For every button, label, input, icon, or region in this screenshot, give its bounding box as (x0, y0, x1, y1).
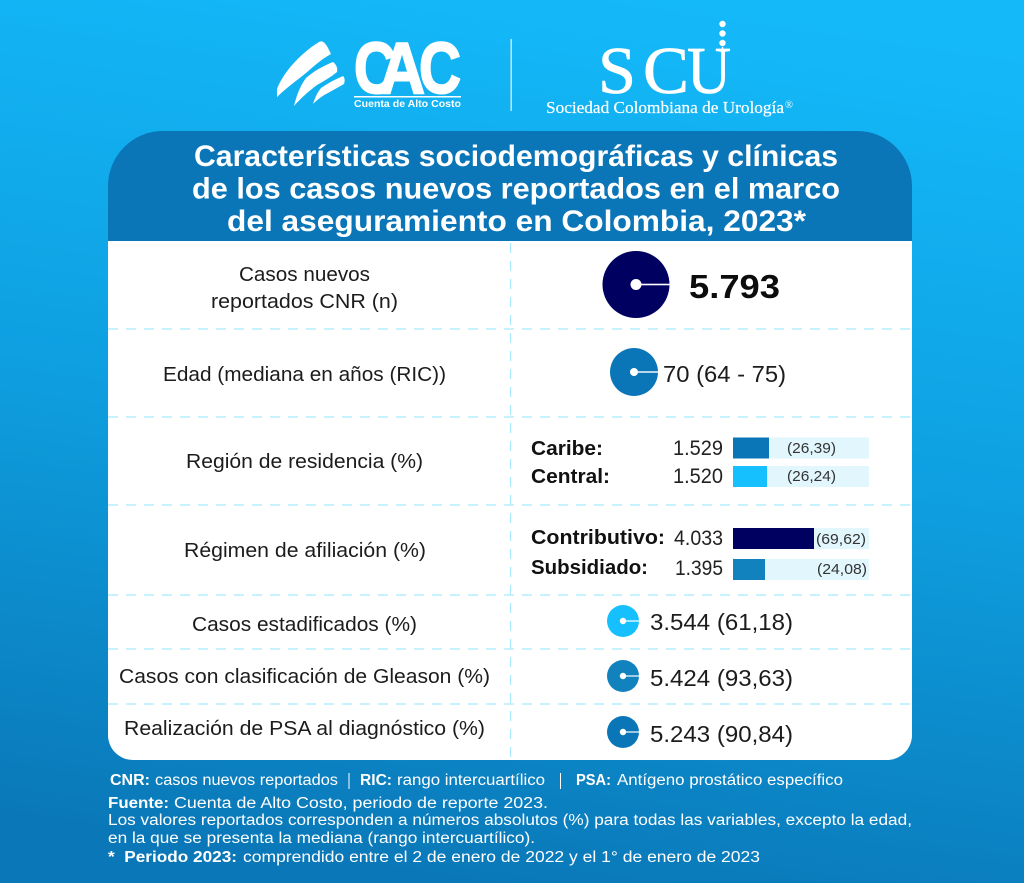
chart: region bars: (26,39) (787, 440, 836, 457)
footer: abbreviations (110, 772, 843, 789)
icon: circle PSA (607, 716, 640, 748)
row label: estadificados: Casos estadificados (%) (192, 614, 417, 636)
title: de los casos nuevos reportados en el marco (192, 172, 840, 206)
logo divider (510, 39, 512, 111)
value: casos nuevos: 5.793 (689, 268, 780, 305)
footer: source and notes: Los valores reportados corresponden a números absolutos (%) para todas las variables, excepto la edad, (108, 812, 912, 829)
icon: circle gleason (607, 660, 640, 692)
row label: region: Región de residencia (%) (186, 451, 423, 473)
value: edad: 70 (64 - 75) (663, 361, 786, 387)
chart: regimen bars: 4.033 (674, 527, 723, 550)
footer: abbreviations: casos nuevos reportados (155, 772, 338, 789)
footer: source and notes: en la que se presenta la mediana (rango intercuartílico). (108, 830, 535, 847)
chart: region bars: 1.529 (673, 437, 723, 460)
icon: circle casos nuevos (602, 251, 670, 318)
CAC wordmark (354, 29, 461, 109)
footer: abbreviations: Antígeno prostático específico (617, 772, 843, 789)
footer: abbreviations: PSA: (576, 772, 611, 789)
chart: regimen bars: 1.395 (675, 557, 723, 580)
row label: gleason: Casos con clasificación de Gleason (%) (119, 666, 490, 688)
footer: abbreviations: CNR: (110, 772, 150, 789)
SCU wordmark: C (643, 34, 689, 108)
CAC subtitle: Cuenta de Alto Costo (354, 98, 461, 110)
panel header (108, 131, 912, 241)
logo: SCU (546, 21, 793, 117)
title: Características sociodemográficas y clínicas (194, 140, 838, 173)
panel: main table (108, 131, 912, 760)
icon: CAC swooshes (277, 41, 345, 106)
row label: edad: Edad (mediana en años (RIC)) (163, 364, 446, 386)
row label: regimen: Régimen de afiliación (%) (184, 540, 426, 562)
row label: casos nuevos (211, 264, 398, 313)
panel body (108, 235, 912, 760)
icon: SCU dots (719, 21, 726, 53)
title: del aseguramiento en Colombia, 2023* (227, 205, 806, 238)
footer: source and notes: comprendido entre el 2 de enero de 2022 y el 1° de enero de 2023 (243, 849, 760, 866)
value: PSA: 5.243 (90,84) (650, 721, 793, 747)
SCU subtitle: Sociedad Colombiana de Urología (546, 98, 784, 117)
logo: CAC (277, 29, 461, 110)
row label: casos nuevos: reportados CNR (n) (211, 291, 398, 313)
icon: circle edad (610, 348, 658, 396)
chart: regimen bars: Contributivo: (531, 527, 665, 549)
value: gleason: 5.424 (93,63) (650, 665, 793, 691)
chart: region bars: Central: (531, 466, 610, 488)
chart: region bars: 1.520 (673, 465, 723, 488)
SCU wordmark: U (687, 34, 731, 108)
row label: PSA: Realización de PSA al diagnóstico (%) (124, 718, 485, 740)
chart: regimen bars (531, 527, 869, 580)
footer: abbreviations: rango intercuartílico (397, 772, 545, 789)
registered mark: ® (785, 100, 793, 111)
footer: source and notes: * Periodo 2023: (108, 849, 237, 866)
chart: region bars: (26,24) (787, 468, 836, 485)
footer: abbreviations: RIC: (360, 772, 392, 789)
chart: regimen bars: (24,08) (817, 561, 867, 578)
CAC wordmark: C (354, 29, 396, 109)
title (192, 140, 840, 238)
chart: regimen bars: Subsidiado: (531, 557, 648, 579)
footer: source and notes: Fuente: (108, 795, 169, 812)
footer: source and notes (108, 795, 912, 866)
icon: circle estadificados (607, 605, 640, 637)
chart: region bars: Caribe: (531, 438, 603, 460)
SCU wordmark: S (598, 34, 636, 108)
CAC wordmark: A (379, 29, 425, 109)
footer: source and notes: Cuenta de Alto Costo, periodo de reporte 2023. (174, 795, 548, 812)
SCU wordmark (598, 34, 731, 108)
value: estadificados: 3.544 (61,18) (650, 609, 793, 635)
CAC wordmark: C (419, 29, 461, 109)
row label: casos nuevos: Casos nuevos (239, 264, 370, 286)
chart: regimen bars: (69,62) (816, 531, 866, 548)
chart: region bars (531, 437, 869, 488)
